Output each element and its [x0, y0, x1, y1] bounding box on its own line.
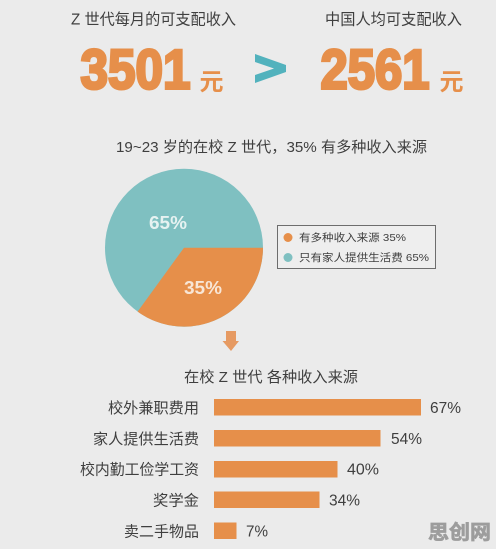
- number: 2561 yuan: 2561: [320, 38, 430, 100]
- row: work-study 40%: [80, 461, 379, 478]
- row: scholarship 34%: 奖学金: [153, 492, 199, 510]
- legend item: family only: 只有家人提供生活费 65%: [299, 251, 429, 264]
- pie label: 35%: 35%: [184, 278, 222, 298]
- number: 3501 yuan: 3501: [80, 38, 190, 100]
- number: 3501 yuan: 元: [200, 69, 224, 96]
- row: family living expenses 54%: 54%: [391, 431, 422, 448]
- row: scholarship 34%: 34%: [329, 492, 360, 510]
- heading: Gen Z monthly disposable income: Z 世代每月的可支配收入: [71, 10, 236, 28]
- row: off-campus part-time 67%: [108, 399, 461, 417]
- row: off-campus part-time 67%: 校外兼职费用: [108, 400, 199, 417]
- row: scholarship 34%: [153, 492, 360, 510]
- watermark: 思创网: [428, 521, 491, 544]
- arrow: down: [222, 331, 239, 351]
- heading: bar chart title: 在校 Z 世代 各种收入来源: [184, 369, 358, 386]
- number: 2561 yuan: 元: [440, 69, 464, 96]
- comparison sign: greater than: [255, 54, 286, 83]
- row: off-campus part-time 67%: 67%: [430, 400, 461, 417]
- bar chart: [80, 399, 461, 540]
- row: family living expenses 54%: 家人提供生活费: [93, 431, 199, 448]
- row: second-hand sales 7%: 卖二手物品: [124, 524, 199, 540]
- pie chart: [105, 169, 263, 327]
- row: second-hand sales 7%: [124, 522, 268, 540]
- row: work-study 40%: 40%: [347, 462, 379, 478]
- row: work-study 40%: 校内勤工俭学工资: [80, 462, 199, 478]
- row: second-hand sales 7%: 7%: [246, 524, 268, 540]
- legend item: multiple sources: 有多种收入来源 35%: [299, 231, 406, 244]
- heading: national disposable income: 中国人均可支配收入: [325, 10, 462, 28]
- legend: [278, 226, 436, 268]
- row: family living expenses 54%: [93, 430, 422, 448]
- pie label: 65%: 65%: [149, 213, 187, 233]
- heading: pie chart title: 19~23 岁的在校 Z 世代，35% 有多种收入来源: [116, 139, 427, 156]
